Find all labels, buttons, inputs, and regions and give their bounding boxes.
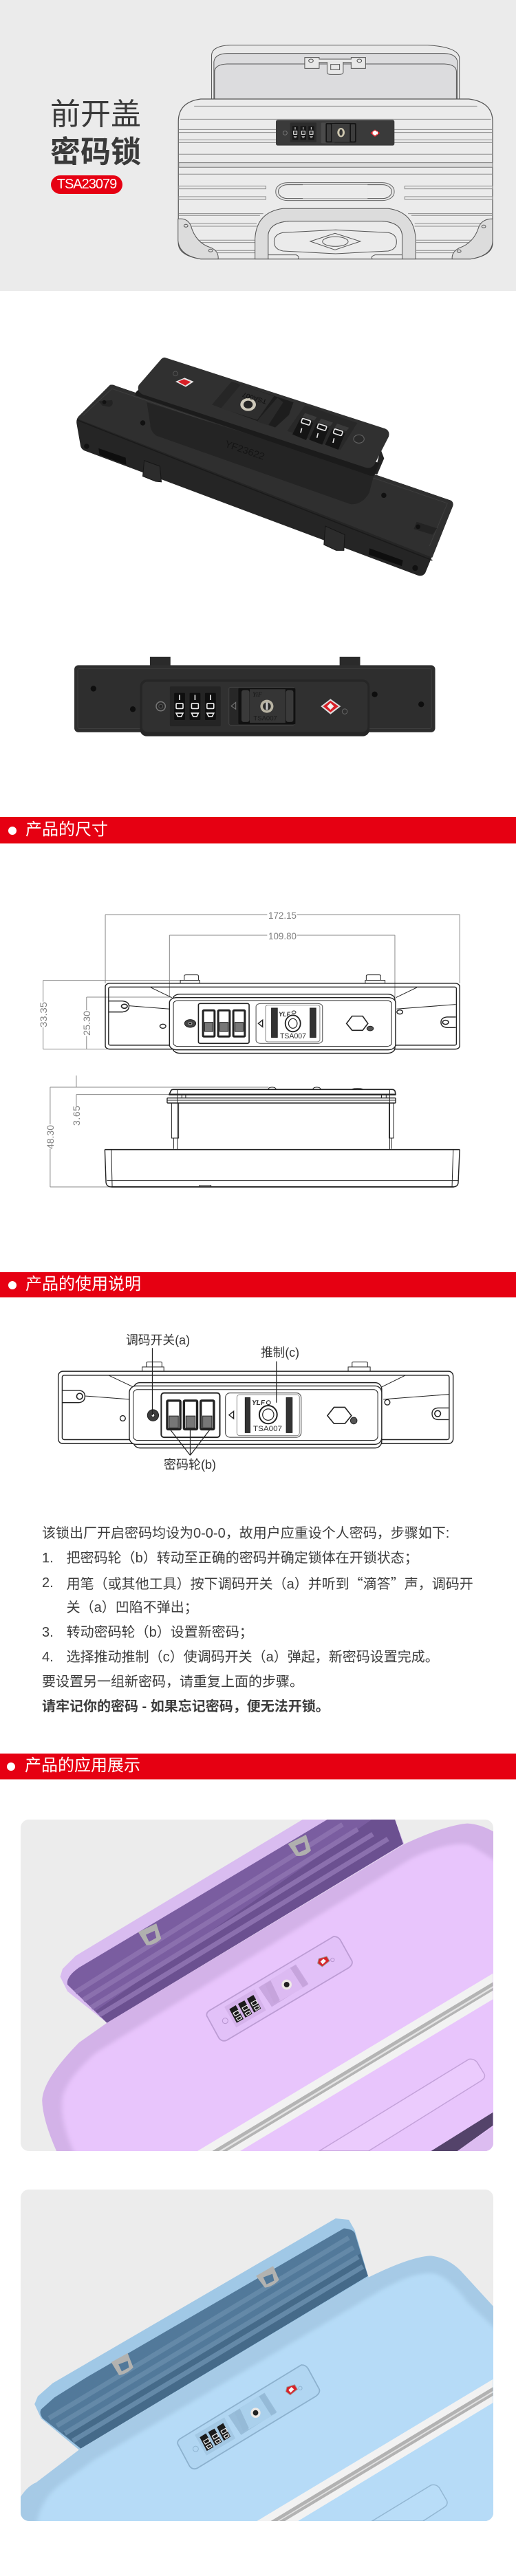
moulded code: YF23622	[224, 438, 266, 462]
engraved labels: TSA007	[280, 1032, 306, 1040]
step 3: 转动密码轮（b）设置新密码；	[67, 1625, 253, 1640]
model badge	[51, 175, 122, 194]
base tray	[76, 384, 453, 576]
step 2 continued: 关（a）凹陷不弹出；	[67, 1600, 198, 1615]
dimension drawing: side view	[45, 1076, 460, 1188]
application photo: blue suitcase	[21, 2190, 493, 2521]
suitcase body	[178, 99, 493, 259]
step 1: 把密码轮（b）转动至正确的密码并确定锁体在开锁状态；	[67, 1551, 418, 1566]
warning: 请牢记你的密码 - 如果忘记密码，便无法开锁。	[42, 1699, 330, 1714]
lock lip	[136, 390, 380, 476]
open lid	[34, 2218, 369, 2450]
section header: 产品的使用说明: 产品的使用说明	[25, 1275, 141, 1294]
lock on blue shell	[178, 2365, 319, 2469]
open lid	[212, 45, 460, 99]
engraved labels	[252, 1399, 282, 1433]
section header: 产品的尺寸: 产品的尺寸	[25, 820, 108, 839]
rail	[257, 2379, 493, 2521]
open lid	[61, 1820, 404, 2023]
intro line: 该锁出厂开启密码均设为0-0-0，故用户应重设个人密码，步骤如下:	[42, 1526, 449, 1541]
lock face plate	[138, 358, 389, 468]
rail	[197, 1974, 493, 2151]
suitcase shell	[42, 1824, 500, 2156]
side profile	[105, 1087, 460, 1187]
clips	[143, 461, 345, 550]
switch a, wheels b, slider c	[147, 1393, 357, 1437]
product photo: front view lock	[74, 657, 435, 736]
dimension labels: 172.15	[268, 910, 297, 921]
dimension lines	[43, 915, 460, 1049]
label: 推制(c): 推制(c)	[261, 1346, 299, 1360]
slider with key cylinder: TSA007	[253, 714, 277, 722]
lock plate outline	[169, 994, 396, 1054]
engraved labels: YLF	[279, 1011, 291, 1018]
engraved labels: TSA007	[253, 1425, 282, 1433]
lock outline	[58, 1362, 453, 1448]
leader lines	[152, 1348, 277, 1455]
engraved labels	[279, 1011, 306, 1040]
title: 密码锁: 密码锁	[50, 135, 141, 169]
TSA logo	[321, 699, 347, 714]
slider with key cylinder	[229, 687, 295, 725]
combination wheels	[170, 686, 221, 726]
lid latches	[111, 2266, 279, 2375]
dimension labels	[38, 910, 297, 1036]
instruction text	[42, 1525, 473, 1714]
step 3: 3.	[42, 1625, 54, 1640]
application photo: purple suitcase	[21, 1820, 493, 2151]
hero panel	[0, 0, 516, 291]
step 1: 1.	[42, 1551, 54, 1566]
label: 调码开关(a): 调码开关(a)	[126, 1333, 190, 1347]
dimension drawing: top view	[38, 910, 460, 1054]
dimension labels: 25.30	[81, 1011, 92, 1036]
repeat note: 要设置另一组新密码，请重复上面的步骤。	[42, 1674, 303, 1690]
engraved slider text: TSA007	[241, 391, 268, 405]
handle recess	[319, 2059, 493, 2151]
title: 前开盖: 前开盖	[50, 98, 141, 131]
section header: 产品的应用展示: 产品的应用展示	[25, 1756, 140, 1775]
lock on purple shell	[206, 1936, 352, 2041]
corner guards	[178, 219, 493, 259]
face plate	[140, 679, 369, 736]
product photo: perspective lock	[76, 358, 453, 576]
recessed handle slot	[276, 183, 394, 201]
dimension labels: 109.80	[268, 930, 297, 941]
step 2: 2.	[42, 1575, 54, 1591]
engraved labels: YLF	[252, 1399, 266, 1407]
dimension labels: 48.30	[45, 1125, 56, 1149]
lock box	[147, 402, 384, 504]
dimension labels	[45, 1106, 82, 1149]
section header: 产品的使用说明	[0, 1272, 516, 1298]
model badge: TSA23079	[57, 177, 116, 192]
wheels and slider outline	[184, 1003, 374, 1043]
section header: 产品的尺寸	[0, 817, 516, 844]
lid latches	[138, 1835, 311, 1945]
suitcase shell	[13, 2256, 500, 2527]
dimension labels: 33.35	[38, 1002, 49, 1027]
lock base outline	[105, 975, 460, 1049]
trolley handle	[255, 208, 416, 259]
side dimension lines	[50, 1076, 268, 1187]
combination lock on hero suitcase	[276, 120, 394, 146]
step 4: 4.	[42, 1650, 54, 1665]
base plate	[74, 657, 436, 732]
slider with key cylinder: YiF	[252, 691, 262, 698]
suitcase line drawing	[178, 45, 493, 260]
annotated usage diagram	[58, 1333, 454, 1472]
step 2: 用笔（或其他工具）按下调码开关（a）并听到“滴答”声，调码开	[67, 1573, 473, 1593]
section header: 产品的应用展示	[0, 1754, 516, 1780]
dimension labels: 3.65	[71, 1106, 82, 1126]
handle recess	[372, 2485, 447, 2521]
step 4: 选择推动推制（c）使调码开关（a）弹起，新密码设置完成。	[67, 1650, 439, 1665]
label: 密码轮(b): 密码轮(b)	[164, 1458, 216, 1472]
